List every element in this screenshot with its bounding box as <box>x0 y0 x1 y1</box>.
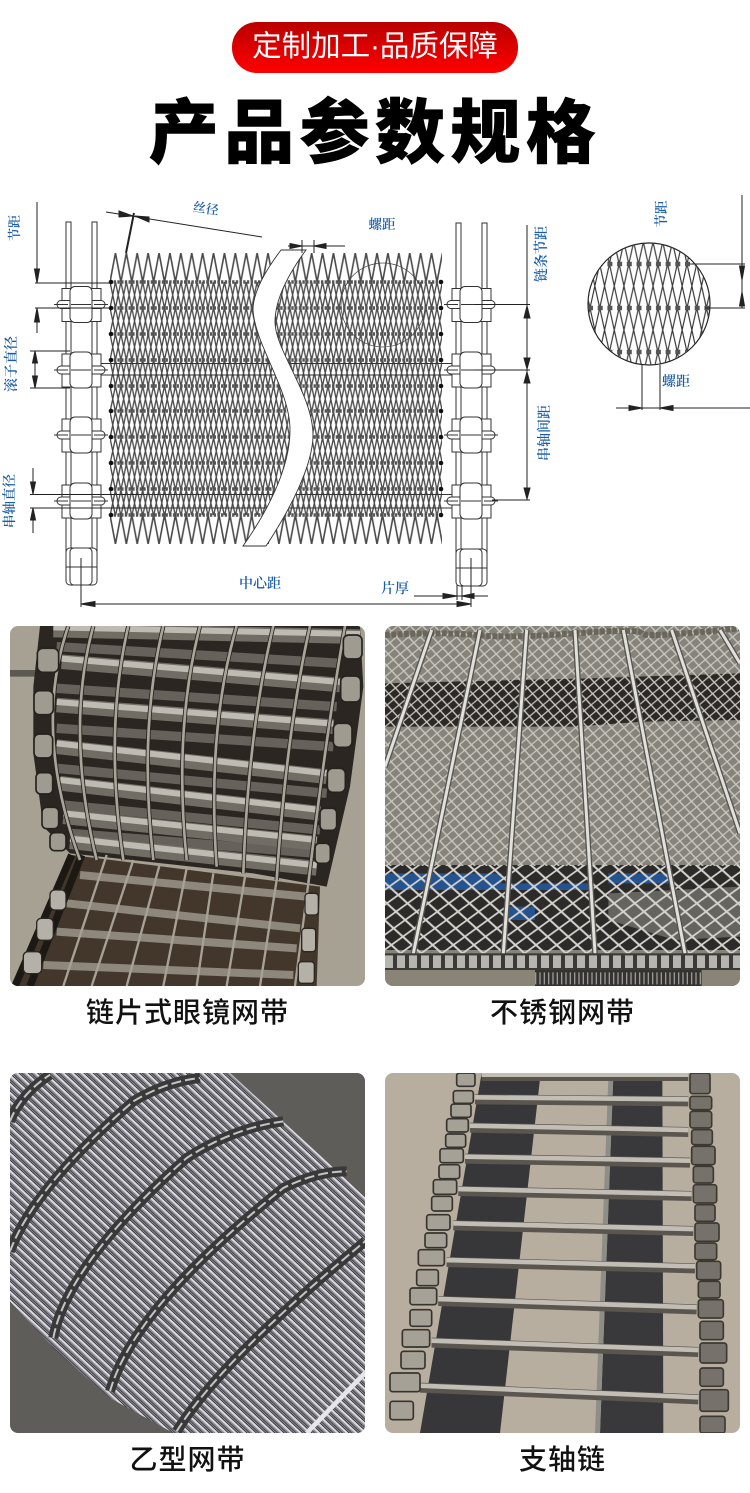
detail circle: mesh enlargement <box>588 243 710 365</box>
label: wire diameter: 丝径 <box>192 196 220 219</box>
dimension: chain pitch and shaft spacing <box>475 225 530 500</box>
label: roller diameter: 滚子直径 <box>1 336 21 392</box>
S-shaped break in belt <box>243 250 313 546</box>
label: detail spiral pitch: 螺距 <box>662 371 690 391</box>
caption: Z-type mesh belt: 乙型网带 <box>129 1444 246 1475</box>
left chain <box>54 222 108 585</box>
label: centre distance: 中心距 <box>239 573 281 593</box>
right chain <box>444 223 498 586</box>
label: pitch: 节距 <box>4 215 23 241</box>
dimension: detail spiral pitch <box>616 365 750 410</box>
label: plate thickness: 片厚 <box>381 578 409 598</box>
photo: support-shaft chain <box>385 1073 740 1433</box>
mesh belt <box>101 253 452 544</box>
badge: custom processing, quality assurance <box>232 22 518 73</box>
badge: custom processing, quality assurance: 定制加工·品质保障 <box>252 30 498 63</box>
caption: stainless steel mesh belt: 不锈钢网带 <box>490 997 635 1028</box>
technical diagram: mesh belt with dimensions <box>0 195 750 608</box>
dimension: wire diameter <box>106 211 262 253</box>
label: detail pitch: 节距 <box>650 200 670 228</box>
caption: chain-plate eye-link belt: 链片式眼镜网带 <box>86 997 289 1028</box>
photo: chain-plate eye-link belt <box>10 626 365 986</box>
label: chain pitch: 链条节距 <box>531 226 551 282</box>
title: 产品参数规格 <box>149 77 601 178</box>
dimension: pitch, left <box>34 202 110 333</box>
caption: support-shaft chain: 支轴链 <box>519 1444 606 1475</box>
dimension: spiral pitch <box>288 240 345 253</box>
photo: Z-type mesh belt <box>10 1073 365 1433</box>
detail circle on belt <box>341 263 425 347</box>
photo: stainless steel mesh belt <box>385 626 740 986</box>
dimension: shaft diameter <box>30 468 138 533</box>
label: spiral pitch: 螺距 <box>368 213 396 233</box>
label: shaft spacing: 串轴间距 <box>534 405 554 461</box>
dimension: roller diameter <box>30 351 70 388</box>
dimension: plate thickness <box>414 585 488 600</box>
dimension: detail pitch <box>690 195 745 308</box>
dimension: centre distance <box>81 558 471 607</box>
